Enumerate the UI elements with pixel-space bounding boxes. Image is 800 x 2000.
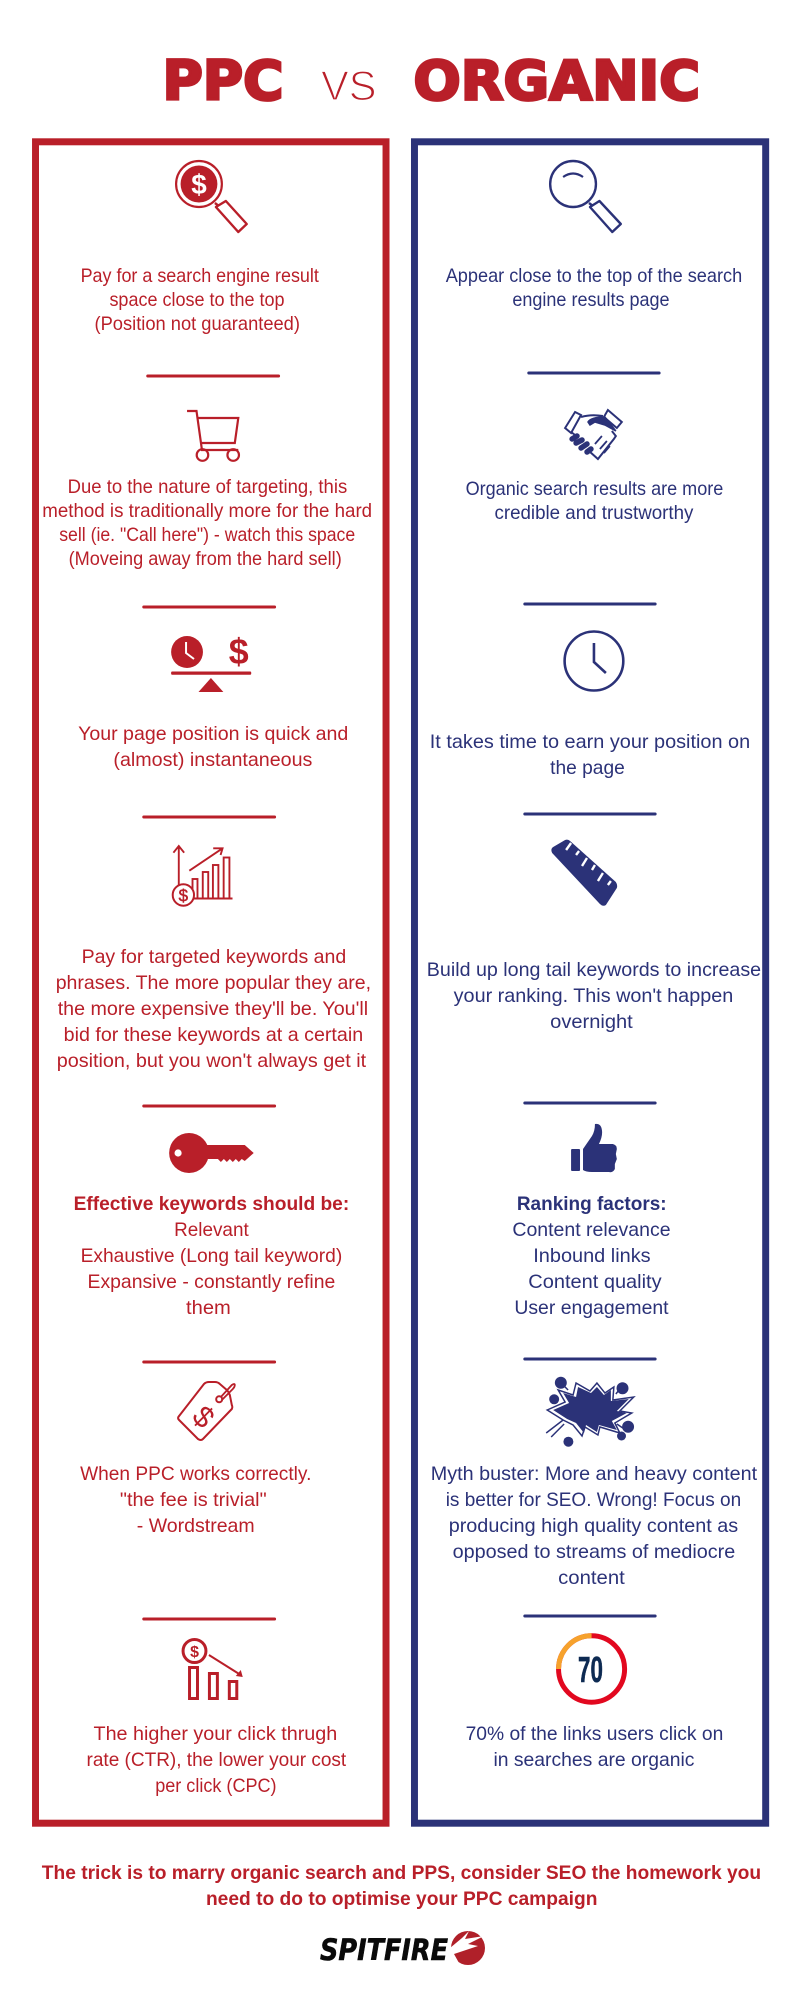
text: effective keywords: Effective keywords should be: (74, 1194, 349, 1215)
icon: time and money scale: $ (229, 632, 249, 672)
icon: thumbs up (571, 1124, 617, 1172)
text: effective keywords (74, 1194, 349, 1319)
text: targeted keywords: phrases. The more popular they are, (56, 973, 371, 994)
text: close to the top: engine results page (512, 290, 670, 311)
title: ORGANIC (414, 50, 700, 112)
text: closing statement: The trick is to marry organic search and PPS, consider SEO the homework you (42, 1863, 761, 1884)
text: quote (80, 1464, 311, 1537)
text: ranking factors (512, 1194, 671, 1319)
text: hard sell: sell (ie. "Call here") - watch this space (59, 525, 355, 546)
icon: handshake (565, 410, 622, 459)
text: takes time: It takes time to earn your position on (430, 732, 750, 753)
text: closing statement (42, 1863, 761, 1910)
text: closing statement: need to do to optimise your PPC campaign (206, 1889, 597, 1910)
text: hard sell (42, 477, 372, 570)
text: credible: credible and trustworthy (494, 503, 694, 524)
icon: clock (565, 632, 623, 690)
text: quote: - Wordstream (137, 1516, 255, 1537)
icon: time and money scale (171, 632, 251, 692)
text: quick position: (almost) instantaneous (113, 750, 312, 771)
icon: growth chart with coin: $ (179, 886, 189, 905)
icon: ruler (551, 840, 617, 906)
icon: explosion (546, 1377, 634, 1447)
text: ranking factors: Content relevance (512, 1220, 671, 1241)
text: close to the top (446, 266, 742, 311)
icon: magnifier (550, 161, 621, 232)
title (162, 50, 700, 112)
title: PPC (162, 50, 284, 112)
text: long tail keywords (427, 960, 761, 1033)
icon: dollar magnifier: $ (191, 169, 207, 200)
text: effective keywords: Exhaustive (Long tail keyword) (81, 1246, 342, 1267)
text: credible: Organic search results are more (466, 479, 723, 500)
text: long tail keywords: Build up long tail keywords to increase (427, 960, 761, 981)
text: 70 percent organic: in searches are organic (493, 1750, 694, 1771)
text: pay for position: space close to the top (109, 290, 285, 311)
icon: dollar magnifier (176, 161, 247, 232)
text: targeted keywords: bid for these keywords at a certain (64, 1025, 363, 1046)
text: long tail keywords: overnight (550, 1012, 634, 1033)
text: long tail keywords: your ranking. This won't happen (454, 986, 733, 1007)
icon: growth chart with coin (173, 846, 233, 906)
icon: cost falling bars (183, 1640, 243, 1698)
text: takes time: the page (550, 758, 625, 779)
text: hard sell: Due to the nature of targeting, this (68, 477, 347, 498)
text: ranking factors: Inbound links (533, 1246, 651, 1267)
text: quick position (78, 724, 348, 771)
text: targeted keywords (56, 947, 371, 1072)
text: quote: When PPC works correctly. (80, 1464, 311, 1485)
panel: PPC (36, 142, 386, 1823)
text: click through rate: rate (CTR), the lower your cost (87, 1750, 347, 1771)
icon: 70 percent gauge (559, 1636, 625, 1702)
text: hard sell: (Moveing away from the hard sell) (69, 549, 342, 570)
text: myth buster: opposed to streams of mediocre (453, 1542, 735, 1563)
text: close to the top: Appear close to the top of the search (446, 266, 742, 287)
text: myth buster: is better for SEO. Wrong! Focus on (446, 1490, 741, 1511)
title: VS (321, 62, 376, 109)
icon: key (169, 1133, 254, 1173)
text: effective keywords: Expansive - constantly refine (88, 1272, 335, 1293)
logo: Spitfire: SPITFIRE (320, 1933, 448, 1967)
text: targeted keywords: Pay for targeted keywords and (82, 947, 346, 968)
text: takes time (430, 732, 750, 779)
text: targeted keywords: the more expensive they'll be. You'll (58, 999, 368, 1020)
text: click through rate (87, 1724, 347, 1797)
text: myth buster: content (558, 1568, 626, 1589)
text: click through rate: per click (CPC) (155, 1776, 277, 1797)
icon: shopping cart (187, 411, 239, 461)
icon: price tag: $ (186, 1400, 221, 1435)
text: effective keywords: them (186, 1298, 231, 1319)
panel: Organic (414, 142, 766, 1823)
icon: 70 percent gauge: 70 (578, 1650, 603, 1690)
text: 70 percent organic: 70% of the links users click on (466, 1724, 723, 1745)
text: hard sell: method is traditionally more for the hard (42, 501, 372, 522)
text: ranking factors: User engagement (514, 1298, 669, 1319)
icon: price tag (178, 1382, 235, 1440)
text: pay for position (81, 266, 320, 335)
text: quick position: Your page position is quick and (78, 724, 348, 745)
text: myth buster: producing high quality content as (449, 1516, 738, 1537)
text: quote: "the fee is trivial" (120, 1490, 267, 1511)
text: ranking factors: Content quality (528, 1272, 662, 1293)
text: click through rate: The higher your click thrugh (94, 1724, 337, 1745)
text: targeted keywords: position, but you won't always get it (57, 1051, 367, 1072)
text: ranking factors: Ranking factors: (517, 1194, 667, 1215)
text: credible (466, 479, 723, 524)
text: 70 percent organic (466, 1724, 723, 1771)
text: effective keywords: Relevant (174, 1220, 249, 1241)
text: pay for position: Pay for a search engine result (81, 266, 320, 287)
text: myth buster (431, 1464, 758, 1589)
text: pay for position: (Position not guaranteed) (95, 314, 300, 335)
icon: cost falling bars: $ (190, 1644, 199, 1661)
text: myth buster: Myth buster: More and heavy content (431, 1464, 758, 1485)
